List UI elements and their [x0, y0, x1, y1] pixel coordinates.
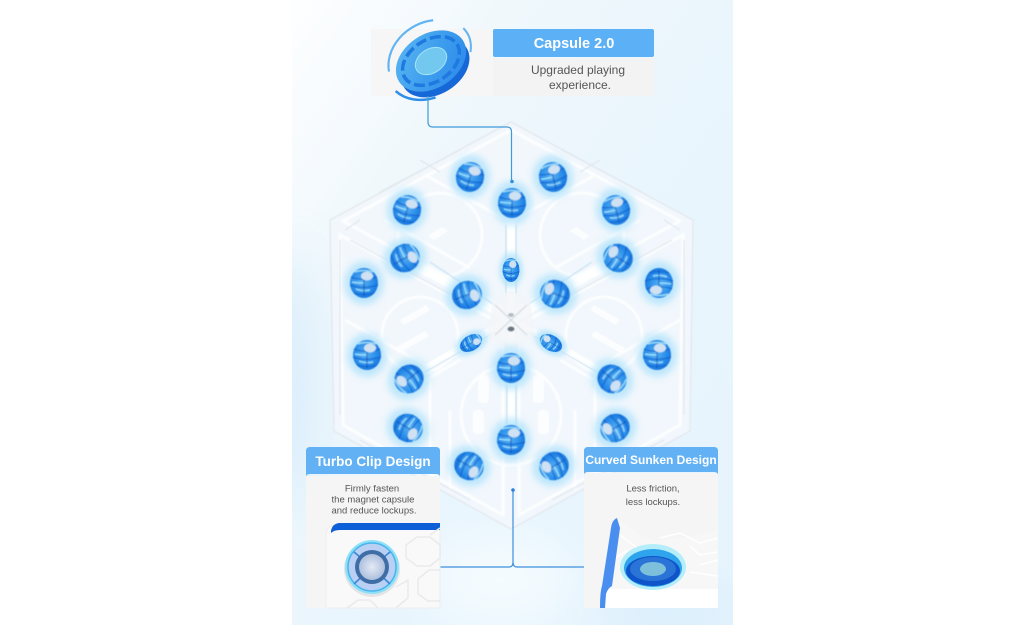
- panel: Turbo Clip Design: [306, 447, 440, 608]
- capsules: bottom: [440, 325, 583, 494]
- callout: Capsule 2.0: [371, 4, 654, 115]
- text block: Firmly fasten: [345, 484, 399, 494]
- icon: blue capsule disc: [371, 4, 488, 115]
- heading: Capsule 2.0: [534, 36, 614, 52]
- heading: Curved Sunken Design: [585, 453, 717, 467]
- heading: Turbo Clip Design: [315, 454, 431, 469]
- text block: and reduce lockups.: [331, 506, 417, 516]
- capsules: top: [376, 151, 647, 321]
- text block: Less friction,: [626, 484, 680, 494]
- text block: less lockups.: [626, 497, 680, 508]
- capsules: sides: [344, 261, 679, 456]
- panel: Curved Sunken Design: [584, 447, 718, 608]
- background panel: [255, 0, 740, 625]
- connector: top callout to capsule: [428, 96, 514, 183]
- transparent cube: [330, 122, 693, 529]
- text block: Upgraded playing: [531, 63, 625, 77]
- text block: experience.: [549, 78, 611, 92]
- text block: the magnet capsule: [332, 494, 414, 506]
- illustration: sunken corner with capsule: [600, 518, 718, 608]
- connector: cube to lower callouts: [440, 488, 584, 567]
- illustration: corner with capsule: [326, 523, 440, 608]
- central star frame: [420, 215, 602, 430]
